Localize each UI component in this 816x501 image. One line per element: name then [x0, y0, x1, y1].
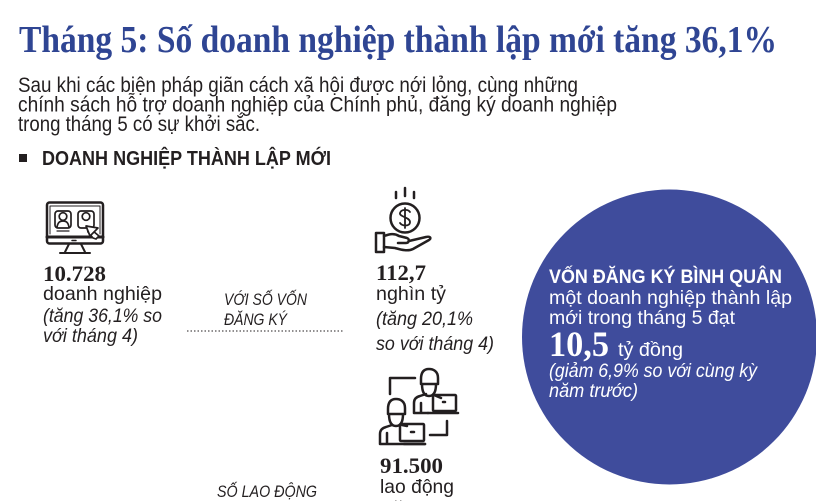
intro paragraph: chính sách hỗ trợ doanh nghiệp của Chính phủ, đăng ký doanh nghiệp: [18, 94, 617, 116]
stat: workers: 91.500: [380, 453, 443, 478]
stat: capital: nghìn tỷ: [376, 283, 446, 305]
circle comparison note: [549, 361, 758, 402]
intro paragraph: [18, 74, 617, 136]
stat: capital: so với tháng 4): [376, 334, 494, 355]
label: registered capital: [224, 290, 308, 329]
circle comparison note: năm trước): [549, 381, 638, 402]
stat: capital: 112,7: [376, 260, 426, 285]
circle value: tỷ đồng: [618, 339, 683, 361]
intro paragraph: Sau khi các biện pháp giãn cách xã hội được nới lỏng, cùng những: [18, 74, 578, 97]
stat: businesses: với tháng 4): [43, 326, 138, 347]
circle value: [549, 324, 683, 364]
circle description: mới trong tháng 5 đạt: [549, 307, 736, 329]
stat: workers: lao động: [380, 476, 454, 498]
icon: two workers with laptops: [380, 369, 458, 444]
circle description: [549, 287, 792, 329]
stat: capital: (tăng 20,1%: [376, 309, 473, 330]
stat: businesses: (tăng 36,1% so: [43, 306, 162, 327]
circle value: 10,5: [549, 324, 609, 364]
panel: average registered capital circle: [522, 190, 816, 484]
stat: workers: [380, 453, 492, 501]
stat: businesses: doanh nghiệp: [43, 283, 162, 305]
circle comparison note: (giảm 6,9% so với cùng kỳ: [549, 361, 758, 382]
stat: businesses: 10.728: [43, 261, 106, 286]
circle heading: VỐN ĐĂNG KÝ BÌNH QUÂN: [549, 266, 782, 288]
icon: monitor with two user profiles and cursor: [47, 202, 103, 253]
stat: capital: [376, 260, 494, 355]
label: workers: SỐ LAO ĐỘNG: [217, 482, 317, 501]
circle description: một doanh nghiệp thành lập: [549, 287, 792, 309]
stat: businesses: [43, 261, 162, 347]
label: registered capital: VỚI SỐ VỐN: [224, 290, 308, 309]
icon: hand holding dollar coin: [376, 188, 430, 252]
intro paragraph: trong tháng 5 có sự khởi sắc.: [18, 113, 260, 136]
label: registered capital: ĐĂNG KÝ: [224, 310, 288, 329]
section heading: DOANH NGHIỆP THÀNH LẬP MỚI: [42, 146, 331, 170]
